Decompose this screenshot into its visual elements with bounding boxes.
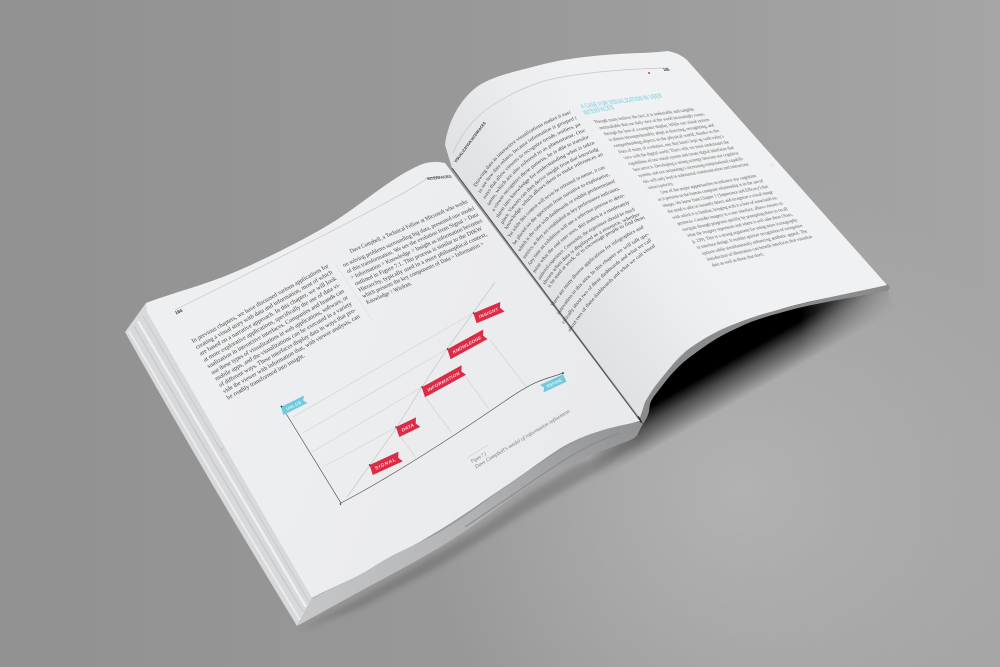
figure caption: Dave Campbell's model of information refinement.	[473, 408, 572, 471]
right page number, marker and running head: VISUALIZATION INTERFACES	[454, 121, 487, 164]
text block: left page second column	[341, 198, 489, 306]
gutter line	[452, 168, 639, 419]
flag: knowledge: KNOWLEDGE	[452, 335, 482, 355]
axis markers	[281, 312, 564, 505]
text block: right page, right column: Though many believe the fact, it is undeniable and tangible	[592, 106, 697, 125]
left page number and running head: INTERFACES	[426, 174, 453, 181]
text block: left page second column: on solving problems surrounding big data, presented one model	[341, 205, 476, 269]
right page	[445, 51, 887, 419]
text block: right page, right column: images. We know from Chapter 1 ('Importance and Efficacy') that	[661, 183, 770, 209]
text block: right page, left column (curved): mine what the end user sees, this makes it a moderately	[533, 201, 630, 273]
text block: left page second column: outlined in Figure 7.1. This process is similar to the DIKW	[353, 226, 484, 287]
text block: right page, right column: view with the digital world. That's why we must understand the	[622, 140, 731, 161]
text block: right page, left column (curved): There are many diverse applications for infographics and	[550, 225, 644, 306]
text block: right page, left column (curved): Yet while this content will never be rebooted in nature, it can	[507, 166, 605, 237]
faint column guide marks	[220, 263, 372, 450]
right page edge thickness	[640, 284, 890, 424]
right page number, marker and running head	[454, 67, 774, 167]
flag: insight	[473, 302, 505, 323]
left page number and running head	[174, 174, 453, 316]
text block: right page, left column (curved): a viewer recognizes those patterns, he is able to transform	[492, 136, 588, 212]
running header rule, right	[453, 68, 667, 153]
text block: right page, right column: as it pertains to the human-computer relationship is in the use of	[656, 178, 765, 203]
text block: left page second column: of this transformation. We see the evolution from Signal > Data	[345, 211, 480, 275]
text block: right page, right column	[592, 106, 814, 268]
flag: information: INFORMATION	[427, 370, 461, 393]
text block: right page, right column: is almost incomprehensibly adept at detecting, recognizing, and	[608, 123, 716, 143]
text block: right page, left column (curved): which is the case with dashboards or exhibit predetermined	[518, 179, 615, 252]
text block: right page, right column: with which it is familiar, bringing with it a host of associated ex-	[671, 195, 780, 221]
figure caption: Figure 7.1	[470, 452, 488, 465]
text block: left page intro paragraph: at more explorative applications, specifically the use of data vi-	[202, 282, 342, 363]
heading: a case for visualization in user interfaces: A CASE FOR VISUALIZATION IN USER	[578, 92, 664, 110]
book: left page block edge	[125, 303, 312, 626]
text block: left page intro paragraph: of different ways. These interfaces display data in ways that pro-	[218, 307, 357, 389]
book: bottom page block edge	[297, 422, 643, 626]
flag: value	[281, 395, 307, 415]
text block: right page, left column (curved): terns, which are also referred to as phenomena. Once	[488, 129, 586, 206]
text block: right page, left column (curved): Any time an exhibition will use a selection process to deter-	[528, 194, 624, 266]
text block: right page, right column: comprehending objects in the physical world, thanks to the	[612, 128, 721, 149]
left page number and running head: 184	[174, 308, 184, 316]
text block: right page, left column (curved): knowledge, which allows them to make inferences and	[504, 154, 603, 230]
text block: right page, right column: One of the major opportunities to enhance our cognition	[659, 173, 758, 195]
text block: right page, left column (curved): Drawing data in interactive visualizations makes it easier	[473, 110, 571, 187]
text block: left page intro paragraph: be readily transformed into insight.	[226, 353, 306, 401]
text block: left page intro paragraph: are based on a narrative approach. In this chapter, we will look	[198, 275, 338, 357]
flag: knowledge	[447, 329, 488, 359]
text block: right page, right column: navigate through programs quickly by prompting them to recall	[681, 207, 790, 233]
text block: left page second column: Hierarchy, typically used in a more philosophical context,	[357, 231, 489, 293]
text block: right page, right column: unmistakable that our daily view of the world increasingly comes	[597, 111, 706, 131]
text block: right page, right column: through the lens of a computer display. While our visual system	[602, 117, 711, 137]
text block: right page, left column (curved): metrics, as they are established as key performance indicators.	[523, 188, 620, 259]
flag: insight: INSIGHT	[478, 307, 499, 319]
left page	[146, 162, 640, 598]
right page number, marker and running head: 185	[662, 67, 671, 72]
text block: left page intro paragraph: vide the viewer with information that, with viewer analysis, can	[222, 313, 362, 395]
text block: right page, left column (curved): about two of these dashboards and what we call visual	[568, 244, 656, 332]
text block: right page, left column (curved): shown when data is displayed as a resource, whether	[543, 213, 640, 285]
chart guide lines	[293, 282, 527, 497]
text block: right page, left column (curved): it be used at work, or to encourage people to find them	[548, 216, 645, 288]
running header rule, left	[175, 178, 427, 310]
flag: refine	[540, 374, 566, 392]
text block: left page intro paragraph: In previous chapters, we have discussed various applications for	[191, 263, 331, 345]
text block: left page intro paragraph: sualization in interactive interfaces. Companies and brands can	[206, 288, 346, 370]
flag: value: VALUE	[286, 400, 302, 412]
text block: right page, left column (curved): place. Viewers can then derive insight from that knowledge,	[501, 148, 598, 225]
text block: right page, left column (curved): to see how data relates, because information is grouped in	[478, 116, 577, 193]
text block: right page, right column: options while simultaneously enhancing aesthetic appeal. The	[701, 229, 809, 257]
cast shadows under the book	[300, 288, 905, 630]
text block: left page second column: which presents the key components of Data > Information >	[361, 241, 486, 300]
text block: right page, right column: in interface design. It enables quicker recognition of navigation	[695, 222, 804, 251]
text block: right page, left column (curved)	[473, 110, 656, 332]
flag: signal	[370, 451, 403, 475]
flag: data: DATA	[401, 422, 415, 434]
text block: right page, left column (curved): cifically about two of these dashboards and what we call	[562, 238, 652, 324]
text block: right page, left column (curved): be placed on the spectrum from narrative to explorative,	[512, 174, 610, 245]
text block: right page, right column: data as well as those that don't.	[711, 252, 766, 268]
text block: right page, right column: increases in productivity.	[647, 181, 675, 191]
text block: right page, right column: best serve it. Developing a strong synergy between our cognitive	[632, 151, 741, 173]
flag: information	[422, 365, 466, 397]
flag: refine: REFINE	[546, 377, 563, 389]
text block: right page, right column: the mind is able to instantly detect and recognize a visual image	[666, 190, 775, 215]
text block: left page second column: Knowledge > Wisdom.	[365, 280, 414, 306]
text block: left page intro paragraph: creating a visual story with data and information, most of which	[194, 269, 334, 351]
text block: right page, right column: what the imagery represents and where it will take them (Nass,	[685, 211, 794, 239]
text block: right page, right column: lines of many of evolution, one that hasn't kept up with today's	[617, 133, 726, 155]
text block: right page, right column: p. 239). This is a strong argument for using more iconography	[690, 217, 799, 245]
text block: right page, right column: systems and our technology's increasing computational capabili-	[637, 156, 745, 179]
chart: Dave Campbell's model of information refinement	[281, 282, 566, 505]
text block: left page intro paragraph: mobile apps, and the visualizations can be executed in a variety	[214, 301, 354, 382]
chart axes	[282, 373, 563, 503]
flag: data	[396, 417, 420, 437]
text block: right page, right column: periences. Consider imagery in a user interface, allows viewers to	[676, 200, 785, 227]
heading: a case for visualization in user interfaces	[578, 92, 664, 117]
text block: left page intro paragraph	[191, 263, 362, 401]
heading: a case for visualization in user interfaces: INTERFACES	[581, 103, 616, 117]
text block: right page, right column: capabilities of our visual system and create digital interfaces that	[627, 145, 736, 167]
text block: right page, left column (curved): them into knowledge for understanding what is taking	[496, 142, 595, 218]
text block: right page, left column (curved): ways that allow viewers to recognize trends, outliers, pat-	[483, 124, 581, 198]
text block: right page, left column (curved): authored experience. Conversely, the experience should be much	[538, 208, 635, 280]
text block: right page, left column (curved): innovation in this area. In this chapter we will talk spe-	[556, 234, 649, 315]
flag: signal: SIGNAL	[375, 457, 396, 472]
text block: right page, right column: ties will only lead to substantial communication and interaction	[642, 162, 750, 185]
text block: left page intro paragraph: use these types of visualizations in web applications, software, or	[210, 294, 350, 376]
text block: left page second column: Dave Campbell, a Technical Fellow at Microsoft who works	[348, 198, 469, 255]
text block: left page second column: > Information > Knowledge > Insight as information becomes	[349, 218, 484, 281]
text block: right page, right column: introduction of illustration can benefit interfaces that visualize	[705, 233, 814, 262]
